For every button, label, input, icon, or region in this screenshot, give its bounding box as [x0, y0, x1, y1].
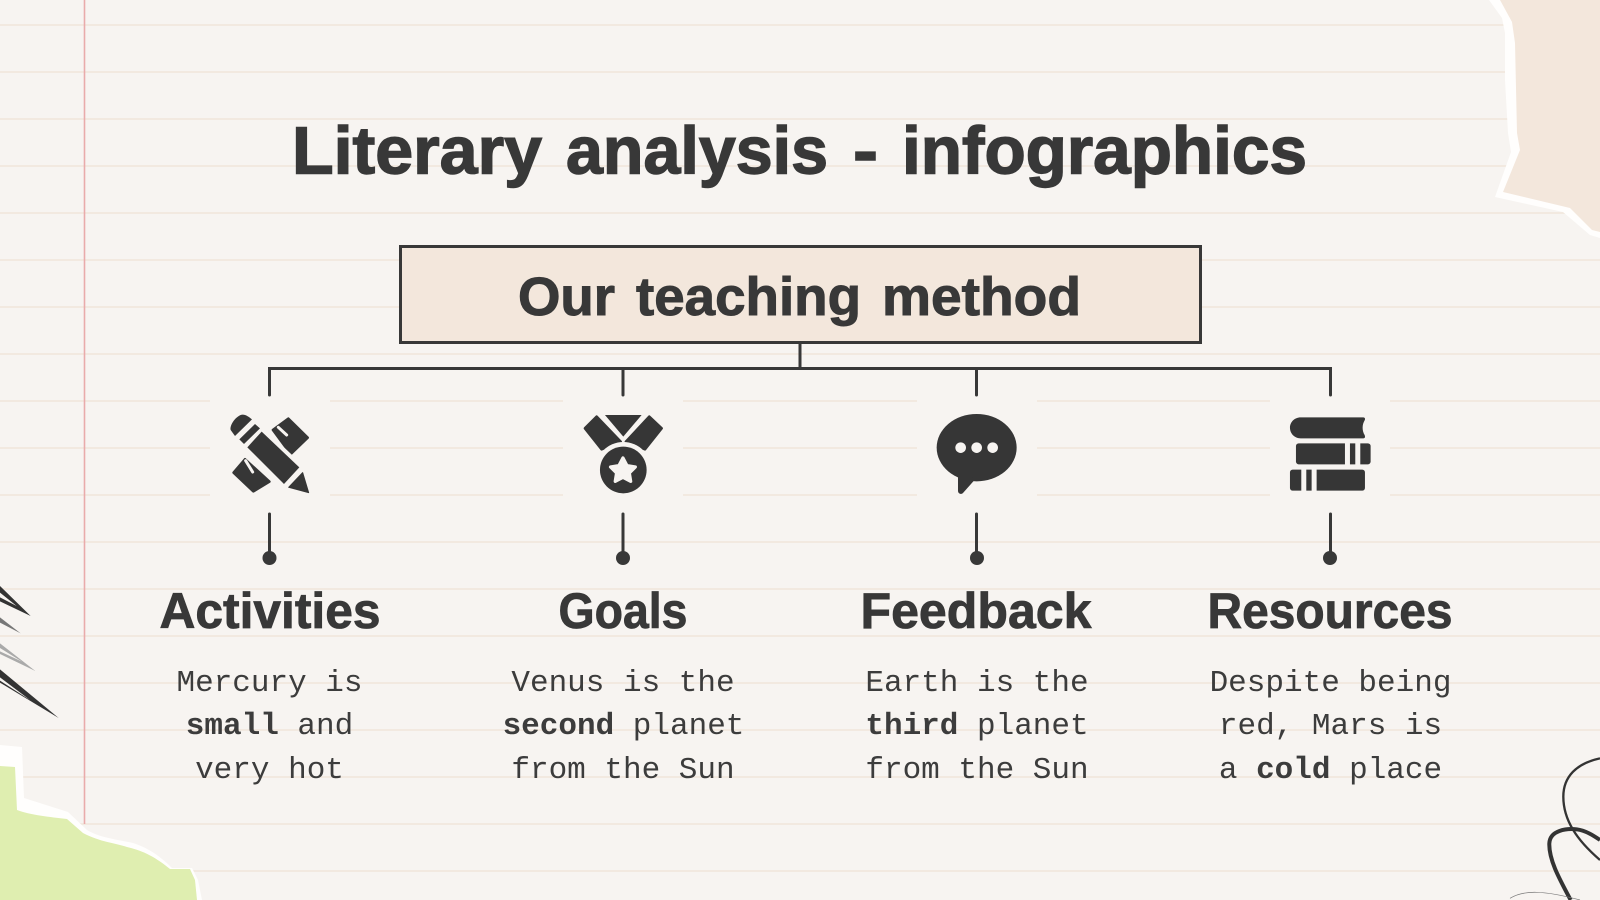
header box: Our teaching method: Our [518, 267, 615, 327]
description: Resources [1210, 666, 1451, 788]
header box: Our teaching method: method [882, 267, 1081, 327]
tree connector [270, 343, 1330, 395]
header box: Our teaching method: teaching [636, 267, 861, 327]
connector stem with dot [262, 514, 276, 565]
connector stem with dot [970, 514, 984, 565]
title: analysis [566, 114, 828, 188]
description: Feedback: Earth is the [865, 666, 1089, 701]
title: - [853, 114, 878, 188]
heading: Resources: Resources [1208, 583, 1452, 639]
description: Feedback: from the Sun [865, 753, 1089, 788]
icon: pencil and ruler [230, 415, 313, 497]
header box: Our teaching method [400, 246, 1200, 342]
heading: Goals: Goals [558, 583, 688, 639]
heading: Activities: Activities [160, 583, 380, 639]
connector stem with dot [1323, 514, 1337, 565]
description: Resources: a cold place [1219, 753, 1442, 788]
description: Goals: from the Sun [511, 753, 735, 788]
description: Goals [503, 666, 744, 788]
column: Resources [1208, 417, 1452, 788]
description: Goals: Venus is the [511, 666, 735, 701]
torn paper: top right beige [1489, 0, 1600, 238]
torn paper: bottom left green [0, 745, 202, 900]
icon: speech bubble [937, 414, 1017, 494]
description: Activities: very hot [195, 753, 344, 788]
description: Feedback [865, 666, 1089, 788]
column: Activities [160, 415, 380, 788]
decorative leaf scribble: left edge [0, 586, 59, 718]
description: Activities [176, 666, 363, 788]
title: Literary [292, 114, 542, 188]
description: Goals: second planet [503, 709, 744, 744]
description: Feedback: third planet [865, 709, 1089, 744]
column: Goals [503, 415, 744, 788]
decorative loop scribble: bottom right [1510, 758, 1600, 900]
description: Resources: Despite being [1210, 666, 1451, 701]
column: Feedback [860, 414, 1092, 788]
description: Activities: small and [186, 709, 353, 744]
description: Activities: Mercury is [176, 666, 363, 701]
icon: books [1290, 417, 1371, 492]
connector stem with dot [616, 514, 630, 565]
heading: Feedback: Feedback [860, 583, 1092, 639]
description: Resources: red, Mars is [1219, 709, 1442, 744]
title: infographics [902, 114, 1307, 188]
icon: medal [585, 415, 662, 498]
